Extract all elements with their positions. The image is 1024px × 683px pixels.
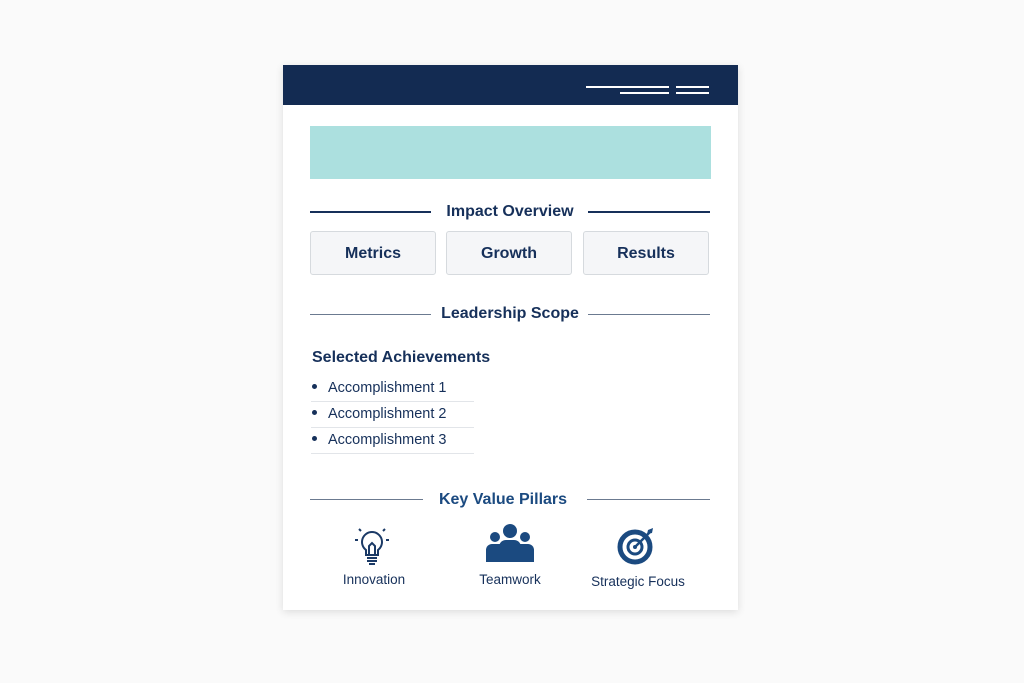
list: achievements: Accomplishment 2 [328,406,446,422]
label: Strategic Focus: Strategic Focus [591,574,685,589]
box: Metrics: Metrics [345,245,401,262]
card [283,65,738,610]
label: Innovation: Innovation [343,572,405,587]
box: Growth: Growth [481,245,537,262]
icon: team [486,524,534,562]
box: Growth [446,231,572,275]
heading: Leadership Scope: Leadership Scope [441,305,579,322]
list: achievements: Accomplishment 1 [328,380,446,396]
label: Teamwork: Teamwork [479,572,541,587]
box: Results [583,231,709,275]
box: Results: Results [617,245,675,262]
header bar [283,65,738,105]
list: achievements: Accomplishment 3 [328,432,446,448]
icon: lightbulb [355,528,389,565]
heading: Selected Achievements: Selected Achievements [312,349,490,366]
heading: Key Value Pillars: Key Value Pillars [439,491,567,508]
teal banner [310,126,711,179]
icon: target [618,528,653,564]
heading: Impact Overview: Impact Overview [446,203,574,220]
list: achievements [311,380,474,454]
box: Metrics [310,231,436,275]
